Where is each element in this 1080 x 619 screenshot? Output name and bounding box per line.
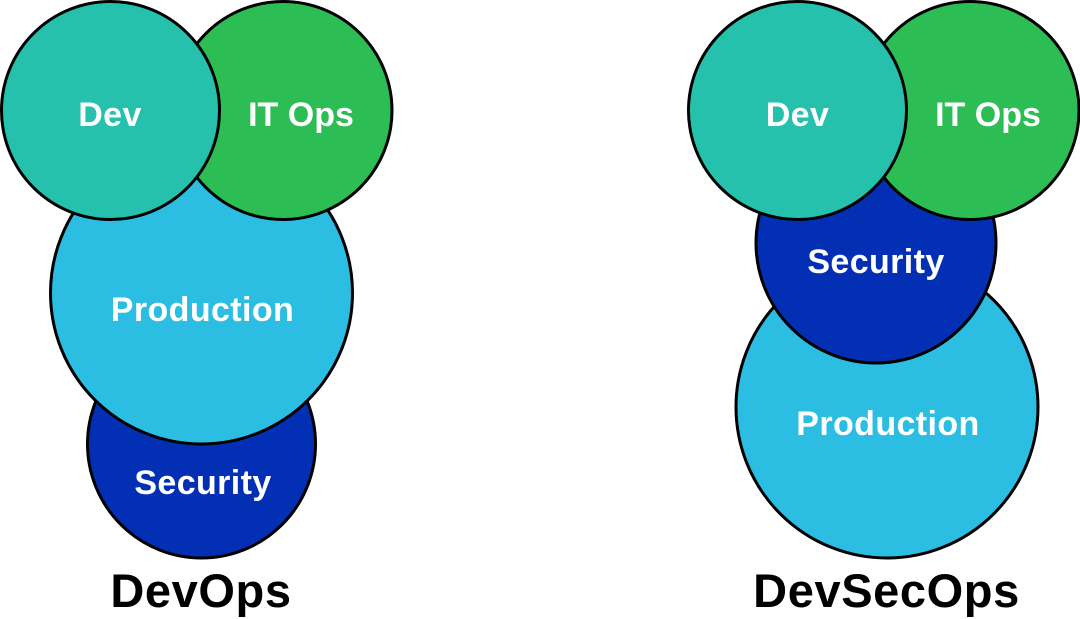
circle: Production: Production bbox=[796, 405, 980, 443]
circle: Production bbox=[736, 256, 1038, 558]
circle: Dev: Dev bbox=[766, 96, 829, 134]
circle: Dev bbox=[688, 2, 906, 220]
circle: Security: Security bbox=[134, 464, 272, 502]
circle: Security: Security bbox=[807, 243, 945, 281]
circle: IT Ops bbox=[174, 2, 392, 220]
circle: IT Ops: IT Ops bbox=[248, 96, 354, 134]
circle: Production bbox=[50, 142, 352, 444]
panel: DevOps bbox=[2, 2, 392, 617]
circle: IT Ops bbox=[861, 2, 1079, 220]
panel: DevSecOps bbox=[688, 2, 1079, 617]
circle: Dev bbox=[2, 2, 220, 220]
circle: Production: Production bbox=[111, 291, 294, 329]
circle: IT Ops: IT Ops bbox=[935, 96, 1041, 134]
heading: DevSecOps: DevSecOps bbox=[753, 564, 1020, 617]
circle: Security bbox=[88, 330, 316, 558]
heading: DevOps: DevOps bbox=[110, 564, 292, 617]
circle: Dev: Dev bbox=[78, 96, 142, 134]
circle: Security bbox=[756, 123, 996, 363]
